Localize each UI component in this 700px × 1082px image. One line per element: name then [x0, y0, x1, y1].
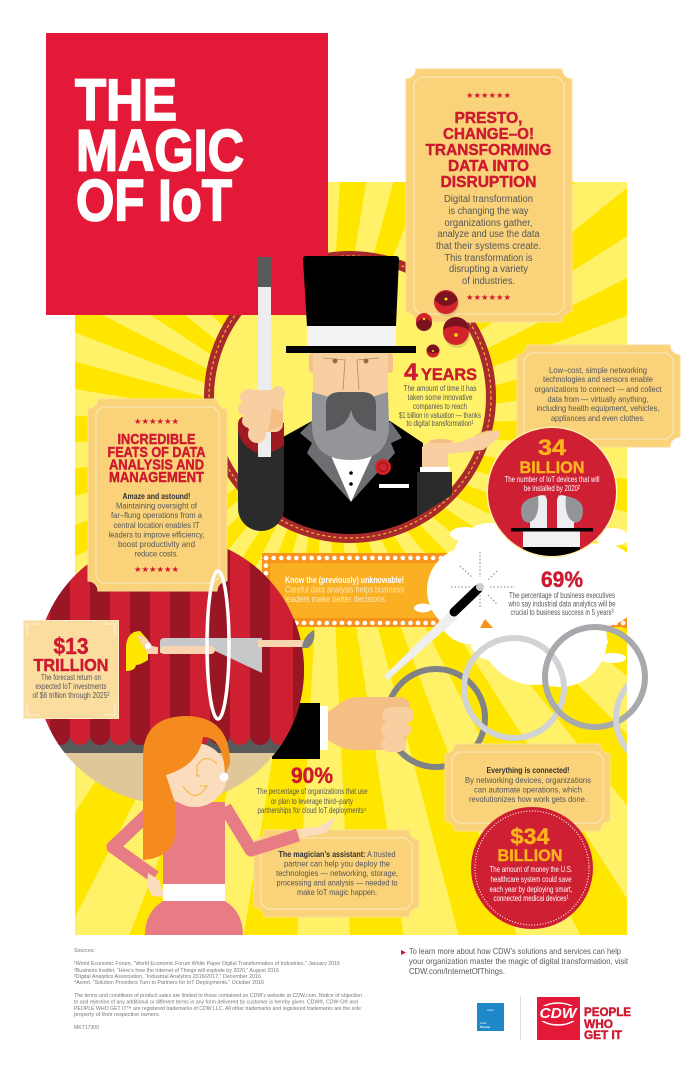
logo: CDW People Who Get It: PEOPLE — [584, 1005, 631, 1019]
logo: CDW People Who Get It: WHO — [584, 1017, 613, 1031]
marquee banner: Careful data analysis helps business — [285, 584, 404, 594]
assistant earring — [220, 772, 228, 782]
magician right arm and open hand — [417, 428, 500, 517]
stat: 90 percent: 90% — [291, 763, 333, 788]
stat: 4 years: to digital transformation¹ — [406, 418, 474, 428]
body: Presto: organizations gather, — [444, 218, 532, 229]
illustration: sawn assistant in box — [126, 630, 314, 673]
illustration: curtain stage — [45, 549, 304, 802]
title block: MAGIC — [76, 118, 244, 184]
logo: Cisco gold partner: Partner — [480, 1025, 491, 1029]
magician hat — [286, 256, 416, 353]
marquee banner: Know the (previously) unknowable! — [285, 575, 404, 585]
magician coat — [283, 421, 423, 540]
panel: 13 trillion card: The forecast return on — [41, 672, 101, 682]
panel: 13 trillion card: of $6 trillion through 2025² — [32, 690, 110, 700]
panel: low-cost networking card: appliances and even clothes. — [551, 413, 645, 423]
icon: linked rings — [388, 624, 648, 770]
red circle: 34 billion healthcare: $34 — [510, 824, 550, 849]
logo: CDW People Who Get It: CDW — [540, 1005, 578, 1022]
body: incredible feats: central location enables IT — [114, 520, 200, 530]
sources footnotes: MKT17300 — [74, 1025, 99, 1031]
call to action: CDW.com/InternetOfThings. — [409, 966, 505, 976]
body: Presto: is changing the way — [448, 206, 528, 217]
panel: everything is connected card: can automate operations, which — [474, 784, 582, 794]
red circle: 34 billion healthcare — [471, 807, 593, 929]
magician moustache — [326, 392, 376, 431]
panel: magician's assistant card: make IoT magic happen. — [297, 887, 377, 897]
magician beard — [312, 392, 389, 460]
heading: Presto: DATA INTO — [448, 158, 529, 175]
magician fist — [238, 386, 285, 443]
panel: low-cost networking card: Low–cost, simple networking — [549, 365, 647, 375]
call to action: your organization master the magic of digital transformation, visit — [409, 956, 629, 966]
stat: 4 years: YEARS — [421, 366, 477, 384]
stars bottom: ★★★★★★ — [134, 565, 179, 574]
call to action: To learn more about how CDW’s solutions and services can help — [409, 946, 621, 956]
magician left arm and sleeve — [238, 417, 284, 531]
stat: 90 percent: The percentage of organizations that use — [256, 786, 368, 796]
red circle: 34 billion — [486, 426, 618, 559]
marquee banner: leaders make better decisions. — [285, 594, 387, 604]
red circle: 34 billion healthcare: each year by deploying smart, — [490, 884, 572, 894]
panel: everything is connected card: By networking devices, organizations — [465, 775, 591, 785]
stat: 90 percent — [256, 763, 368, 815]
sources footnotes: ⁴Avnet, “Solution Providers Turn to Partners for IoT Deployments,” October 2016 — [74, 980, 264, 986]
title block: OF IoT — [76, 168, 232, 234]
heading: Presto: TRANSFORMING — [426, 142, 552, 159]
panel: everything is connected card: revolutionizes how work gets done. — [469, 794, 587, 804]
body: Presto: Digital transformation — [444, 194, 533, 205]
stat: 4 years: The amount of time it has — [404, 383, 476, 393]
logo: CDW People Who Get It — [537, 997, 631, 1042]
body: incredible feats: far–flung operations from a — [111, 510, 202, 520]
stat: 90 percent: partnerships for cloud IoT deployments⁴ — [258, 805, 367, 815]
body: incredible feats — [108, 491, 204, 558]
panel: 13 trillion card: expected IoT investments — [36, 681, 106, 691]
red circle: 34 billion: be installed by 2020² — [524, 483, 580, 493]
red circle: 34 billion healthcare: The amount of money the U.S. — [490, 864, 572, 874]
heading: Presto: PRESTO, — [454, 110, 522, 127]
panel: low-cost networking card — [517, 345, 680, 447]
panel: magician's assistant card: The magician’s assistant: A trusted — [278, 849, 396, 859]
heading: incredible feats — [108, 432, 206, 486]
red circle: 34 billion healthcare: BILLION — [498, 846, 562, 865]
icon: white hoop — [207, 571, 229, 719]
assistant dress — [145, 802, 243, 935]
heading: Presto — [426, 110, 552, 191]
icon: hat with rabbit ears — [511, 495, 593, 559]
body: incredible feats: boost productivity and — [118, 539, 195, 549]
red circle: 34 billion healthcare: healthcare system could save — [490, 874, 572, 884]
stat: 69 percent: crucial to business success in 5 years³ — [510, 607, 614, 617]
panel: magician's assistant card: processing and analysis — needed to — [276, 878, 398, 888]
stars bottom: ★★★★★★ — [466, 293, 511, 302]
panel: magician's assistant card — [254, 830, 419, 917]
body: incredible feats: leaders to improve efficiency, — [108, 530, 204, 540]
heading: incredible feats: ANALYSIS AND — [109, 458, 204, 474]
sources footnotes — [74, 948, 362, 1031]
icon: fist holding rings — [328, 697, 414, 752]
stat: 69 percent: The percentage of business executives — [509, 590, 615, 600]
body: Presto — [436, 194, 541, 287]
body: Presto: disrupting a variety — [449, 264, 528, 275]
illustration: magician — [238, 256, 500, 540]
sources footnotes: Sources: — [74, 948, 95, 954]
panel: low-cost networking card: organizations to connect — and collect — [534, 384, 662, 394]
panel: low-cost networking card: technologies and sensors enable — [543, 374, 653, 384]
body: Presto: that their systems create. — [436, 241, 541, 252]
stars top: ★★★★★★ — [134, 417, 179, 426]
icon: red arrow — [401, 950, 406, 955]
sources footnotes: The terms and conditions of product sales are limited to those contained on CDW’s website at CDW.com. Notice of objection — [74, 993, 362, 999]
logo: CDW People Who Get It: GET IT — [584, 1028, 623, 1042]
panel: everything is connected card: Everything is connected! — [486, 765, 570, 775]
curtain stripes — [45, 549, 304, 745]
assistant hands — [147, 817, 335, 897]
body: Presto: of industries. — [462, 276, 515, 287]
body: Presto: This transformation is — [444, 253, 532, 264]
assistant head — [163, 743, 227, 807]
panel: magician's assistant card: technologies — networking, storage, — [276, 868, 398, 878]
body: incredible feats: Maintaining oversight of — [116, 500, 198, 510]
panel: low-cost networking card: data from — virtually anything, — [548, 394, 648, 404]
stat: 4 years: $1 billion in valuation — thanks — [399, 410, 481, 420]
panel: magician's assistant card: partner can help you deploy the — [284, 858, 390, 868]
body: incredible feats: Amaze and astound! — [122, 491, 191, 501]
icon: wand and sparkles — [384, 552, 515, 680]
stat: 90 percent: or plan to leverage third–party — [271, 796, 354, 806]
panel: 13 trillion card: TRILLION — [34, 655, 108, 675]
panel: 13 trillion card: $13 — [54, 633, 88, 659]
white cloud — [414, 522, 642, 687]
heading: incredible feats: INCREDIBLE — [118, 432, 196, 448]
panel: incredible feats card — [88, 399, 227, 591]
heading: incredible feats: MANAGEMENT — [109, 470, 204, 486]
magician face — [309, 353, 393, 408]
background panel: yellow sunburst — [75, 182, 627, 935]
red circle: 34 billion: BILLION — [520, 458, 584, 477]
sources footnotes: property of their respective owners. — [74, 1012, 160, 1018]
magician sleeve reaching from curtain — [272, 703, 328, 759]
heading: Presto: CHANGE–O! — [443, 126, 534, 143]
panel: everything is connected card — [445, 744, 610, 831]
sources footnotes: ²Business Insider, “Here’s how the Internet of Things will explode by 2020,” August 2016 — [74, 968, 279, 974]
title block: THE — [75, 68, 177, 133]
stat: 69 percent: who say industrial data analytics will be — [508, 598, 616, 608]
stat: 4 years: companies to reach — [413, 401, 467, 411]
assistant face details — [183, 758, 217, 796]
stat: 4 years: 4 — [404, 359, 419, 386]
stat: 4 years: taken some innovative — [408, 392, 473, 402]
panel: 13 trillion card — [24, 620, 118, 718]
stat: 69 percent: 69% — [541, 567, 583, 592]
stars top: ★★★★★★ — [466, 91, 511, 100]
stat: 69 percent — [508, 567, 616, 617]
assistant arms — [113, 807, 298, 877]
marquee banner — [262, 553, 627, 627]
body: incredible feats: reduce costs. — [134, 548, 178, 558]
call to action — [401, 946, 629, 976]
icon: magic balls — [416, 290, 470, 358]
sources footnotes: ¹World Economic Forum, “World Economic Forum White Paper Digital Transformation of Industries,” January 2016 — [74, 961, 340, 967]
sources footnotes: PEOPLE WHO GET IT™ are registered trademarks of CDW LLC. All other trademarks and registered trademarks are the sole — [74, 1006, 361, 1012]
red circle: 34 billion healthcare: connected medical devices¹ — [494, 893, 569, 903]
magician ring frame — [209, 256, 491, 538]
title block — [46, 33, 328, 315]
logo: Cisco gold partner: Gold — [480, 1021, 487, 1025]
logo: Cisco gold partner: cisco — [487, 1008, 494, 1012]
stat: 4 years — [399, 359, 481, 428]
heading: Presto: DISRUPTION — [440, 174, 536, 191]
illustration: assistant — [113, 716, 335, 935]
logo: Cisco gold partner — [477, 1003, 504, 1031]
panel: low-cost networking card: including health equipment, vehicles, — [536, 403, 660, 413]
red circle: 34 billion: The number of IoT devices that will — [504, 474, 600, 484]
body: Presto: analyze and use the data — [438, 229, 540, 240]
sources footnotes: to and rejection of any additional or different terms in any form delivered by customer is hereby given. CDW®, CDW·G® and — [74, 998, 358, 1006]
assistant belt — [163, 884, 225, 901]
red circle: 34 billion: 34 — [538, 435, 567, 460]
heading: incredible feats: FEATS OF DATA — [108, 445, 206, 461]
magician lapels and shirt — [300, 421, 409, 502]
assistant hair — [143, 716, 230, 860]
divider — [520, 996, 521, 1040]
magic wand — [258, 257, 271, 457]
panel: Presto card — [406, 69, 572, 322]
sources footnotes: ³Digital Analytics Association, “Industrial Analytics 2016/2017,” December 2016 — [74, 974, 261, 980]
